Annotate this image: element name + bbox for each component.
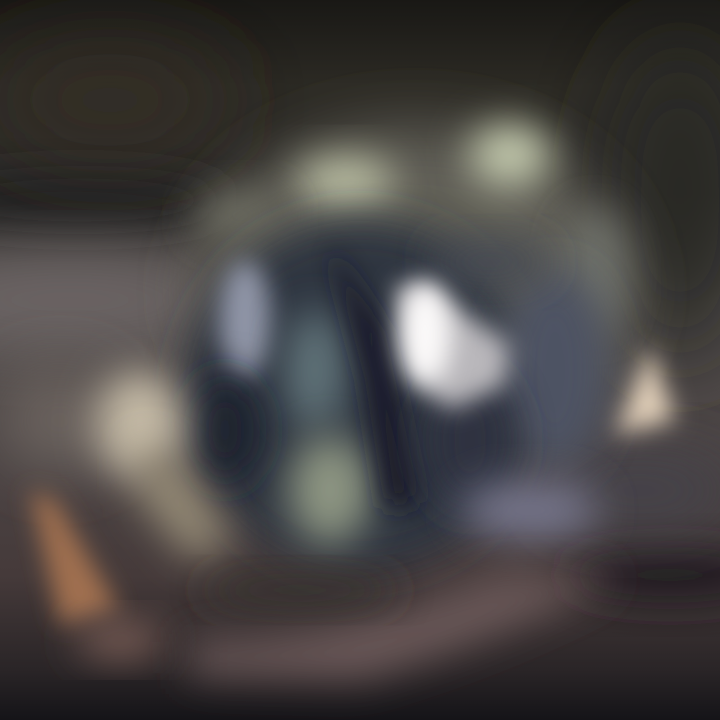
cream shape at left: [0, 370, 235, 560]
sphere body: [185, 220, 610, 570]
orange streak at lower left: [30, 490, 165, 658]
peach highlight at right: [615, 345, 675, 435]
background tones: [0, 30, 720, 603]
halo around sphere: [195, 123, 630, 455]
bright white reflection: [395, 283, 510, 410]
bottom pink band: [190, 574, 620, 680]
lavender lower reflection: [460, 480, 600, 540]
